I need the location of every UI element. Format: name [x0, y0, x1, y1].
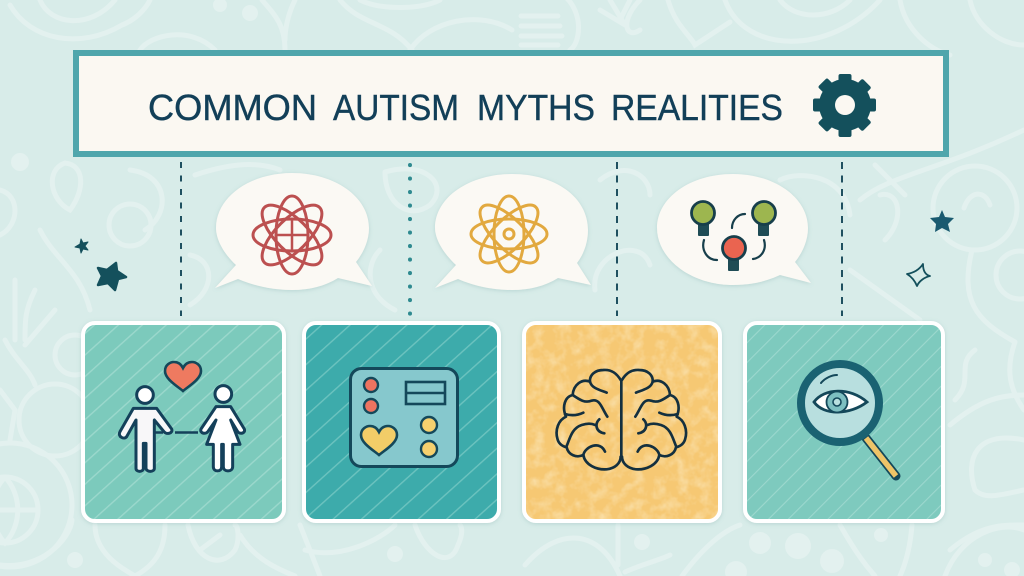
card 3: brain: [524, 323, 720, 521]
speech bubble 1 with red atom: [215, 173, 372, 290]
yellow dots: [421, 417, 437, 457]
card 4: magnifier: [745, 323, 943, 521]
icon: eye: [814, 391, 867, 412]
yellow heart: [361, 426, 397, 455]
title text: REALITIES: [611, 87, 783, 128]
icon: lens: [801, 364, 879, 442]
icon: connected bulbs: [692, 202, 776, 271]
decorative star right: [930, 210, 954, 232]
dashed connector 1: [180, 162, 182, 316]
red indicator dots: [364, 378, 378, 413]
dashed connector 3: [616, 162, 618, 316]
mottled texture: [526, 325, 718, 519]
display: [406, 382, 445, 404]
title text: COMMON: [148, 87, 317, 128]
card 2: control panel: [304, 323, 499, 521]
icon: magnifier handle: [866, 438, 896, 476]
icon: brain: [557, 370, 686, 469]
icon: gear: [813, 74, 876, 137]
title text: MYTHS: [477, 87, 595, 128]
icon: woman: [201, 386, 245, 471]
dashed connector 4: [841, 162, 843, 316]
icon: heart: [165, 362, 201, 391]
decorative star large left: [98, 263, 126, 290]
lens highlight: [821, 375, 837, 383]
dotted connector 2: [408, 165, 412, 316]
panel device: [350, 368, 458, 466]
title text: AUTISM: [333, 87, 459, 128]
icon: man: [119, 387, 172, 471]
speech bubble 3 with light bulbs: [657, 174, 811, 285]
icon: red atom: [253, 196, 331, 274]
decorative sparkle: [907, 264, 930, 286]
connector line: [155, 431, 198, 434]
card 1: connection: [83, 323, 284, 521]
decorative star small left: [75, 239, 88, 253]
speech bubble 2 with yellow atom: [435, 174, 591, 290]
title banner: [76, 53, 946, 154]
icon: yellow atom: [471, 196, 547, 272]
